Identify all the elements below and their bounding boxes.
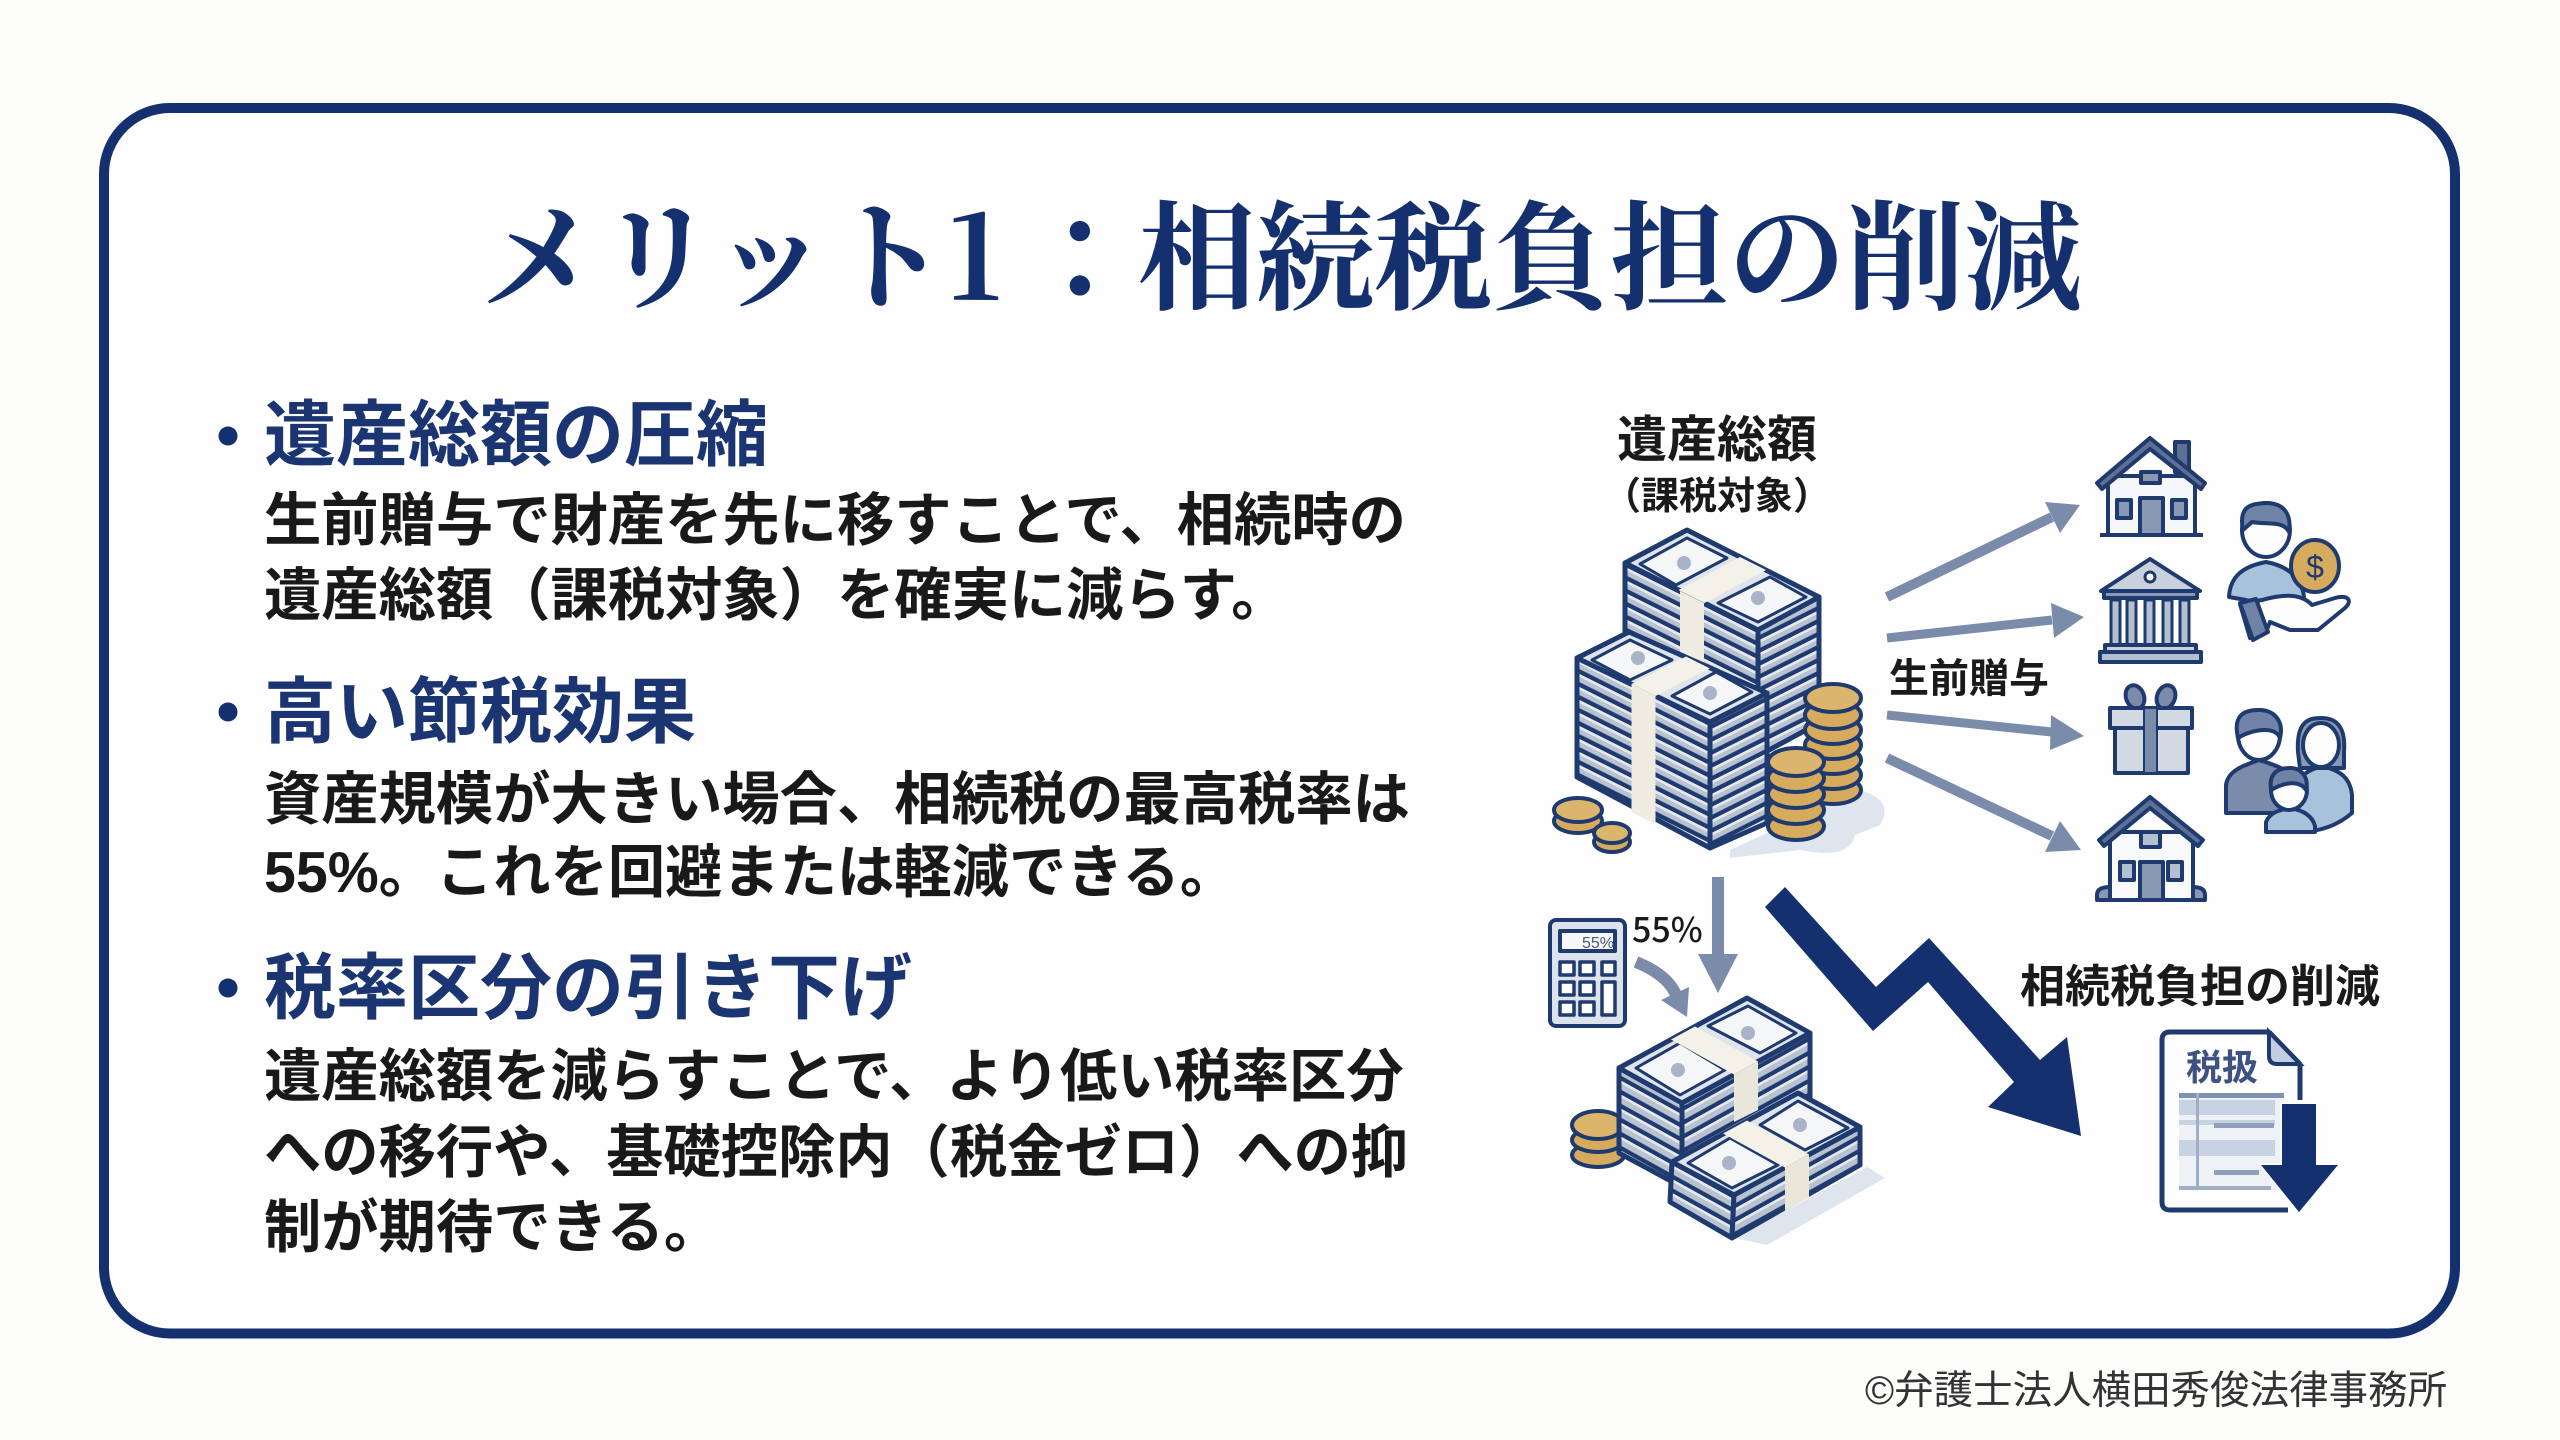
document	[2162, 1032, 2300, 1210]
text block: 高い節税効果	[218, 673, 1410, 905]
body: 制が期待できる。	[264, 1196, 721, 1260]
bullet	[218, 702, 238, 722]
icon: calculator	[1550, 920, 1625, 1026]
text block: 遺産総額の圧縮	[218, 396, 1406, 628]
label: 遺産総額(課税対象)	[1603, 412, 1831, 518]
footer copyright: ©弁護士法人横田秀俊法律事務所	[1865, 1369, 2447, 1413]
body: 遺産総額を減らすことで、より低い税率区分	[264, 1045, 1404, 1109]
body: への移行や、基礎控除内（税金ゼロ）への抑	[264, 1121, 1408, 1185]
icon: person receiving coin	[2229, 503, 2349, 640]
icon: person receiving coin: $	[2306, 549, 2324, 585]
title: ：	[1021, 164, 1139, 334]
arrow: to bank	[1887, 603, 2084, 638]
arrow: straight down	[1698, 877, 1738, 993]
loose coins	[1554, 798, 1630, 852]
big down arrow	[2261, 1104, 2338, 1212]
heading: 高い節税効果	[264, 673, 696, 753]
icon: house	[2097, 438, 2205, 535]
text block: 税率区分の引き下げ	[218, 949, 1408, 1260]
bullet	[218, 426, 238, 446]
label: 税扱: 税扱	[2186, 1047, 2258, 1088]
bullet	[218, 978, 238, 998]
icon: gift	[2110, 683, 2192, 773]
arrow: zigzag decrease	[1765, 887, 2081, 1136]
icon: family	[2226, 710, 2352, 832]
title: メリット1	[480, 164, 1002, 334]
illustration: large money stacks with coins	[1554, 530, 1884, 858]
icon: tax document with down arrow	[2162, 1032, 2338, 1212]
body: 55%。これを回避または軽減できる。	[264, 841, 1237, 905]
label: 遺産総額(課税対象): （課税対象）	[1603, 476, 1831, 518]
money stack: front	[1670, 1093, 1860, 1238]
body: 資産規模が大きい場合、相続税の最高税率は	[264, 768, 1410, 832]
body: 生前贈与で財産を先に移すことで、相続時の	[264, 489, 1406, 553]
arrow: to gift	[1887, 715, 2084, 750]
short coin stack	[1768, 748, 1824, 840]
front money stack	[1577, 632, 1767, 848]
tall coin stack	[1805, 684, 1861, 804]
coins	[1572, 1111, 1624, 1167]
table	[2179, 1093, 2284, 1190]
illustration: reduced money stacks	[1572, 998, 1885, 1245]
label: 遺産総額(課税対象): 遺産総額	[1617, 412, 1817, 468]
shadow	[1730, 790, 1884, 858]
shadow	[1735, 1167, 1885, 1245]
title: 相続税負担の削減	[1138, 164, 2082, 334]
back money stack	[1625, 530, 1819, 756]
label: 相続税負担の削減: 相続税負担の削減	[2020, 961, 2380, 1012]
folded corner	[2269, 1032, 2300, 1064]
icon: calculator: 55%	[1582, 935, 1614, 952]
label: 生前贈与: 生前贈与	[1889, 657, 2049, 701]
body: 遺産総額（課税対象）を確実に減らす。	[264, 564, 1288, 628]
heading: 税率区分の引き下げ	[264, 949, 912, 1029]
panel: rounded navy frame	[104, 108, 2455, 1334]
money stack: rear	[1619, 998, 1810, 1187]
icon: bank	[2100, 559, 2201, 662]
heading: 遺産総額の圧縮	[264, 396, 768, 476]
icon: second house	[2097, 797, 2205, 900]
arrow: to house	[1887, 502, 2080, 597]
arrow: curved to stack	[1636, 962, 1689, 1017]
label: 55%: 55%	[1632, 903, 1703, 952]
arrow: to second house	[1887, 758, 2081, 852]
